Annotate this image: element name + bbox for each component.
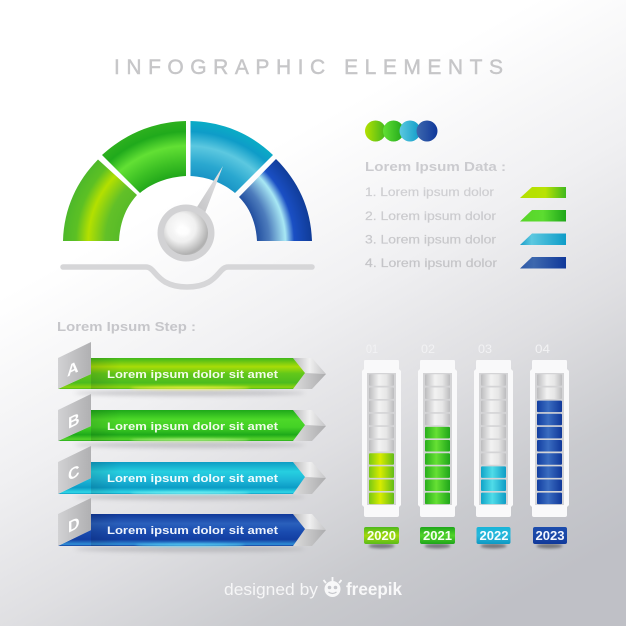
bar column 2023 bbox=[530, 342, 569, 548]
footer credit bbox=[224, 577, 402, 599]
bar column 2020 bbox=[362, 342, 401, 548]
legend item 2: 2. Lorem ipsum dolor bbox=[365, 209, 496, 223]
gauge segment 4 bbox=[239, 159, 312, 241]
column number: 01 bbox=[366, 342, 378, 356]
step ribbon D: Lorem ipsum dolor sit amet bbox=[107, 525, 278, 537]
column number: 02 bbox=[421, 342, 435, 356]
gauge segment 2 bbox=[102, 121, 186, 193]
step ribbon D: D bbox=[68, 513, 80, 537]
year badge bbox=[364, 527, 399, 548]
legend item 3: 3. Lorem ipsum dolor bbox=[365, 232, 496, 246]
column number: 03 bbox=[478, 342, 492, 356]
bar column 2021 bbox=[418, 342, 457, 548]
data legend bbox=[365, 159, 566, 270]
steps heading: Lorem Ipsum Step : bbox=[57, 319, 196, 334]
year badge bbox=[533, 527, 567, 548]
gauge base line bbox=[63, 267, 312, 287]
freepik wordmark: freepik bbox=[346, 579, 402, 599]
bar column 2022 bbox=[474, 342, 513, 548]
legend item 4: 4. Lorem ipsum dolor bbox=[365, 256, 497, 270]
step ribbon A: Lorem ipsum dolor sit amet bbox=[107, 369, 278, 381]
step ribbon A bbox=[58, 342, 326, 396]
legend item 2 bbox=[365, 209, 566, 223]
legend item 1 bbox=[365, 185, 566, 199]
year badge: 2023 bbox=[536, 529, 565, 543]
legend item 3 bbox=[365, 232, 566, 246]
gauge chart bbox=[63, 121, 312, 287]
step ribbon C: Lorem ipsum dolor sit amet bbox=[107, 473, 278, 485]
column number: 04 bbox=[535, 342, 550, 356]
gauge segment 1 bbox=[63, 160, 137, 241]
legend colour dots bbox=[365, 120, 438, 142]
gauge hub bbox=[158, 204, 214, 262]
designed by text: designed by bbox=[224, 581, 319, 599]
legend item 1: 1. Lorem ipsum dolor bbox=[365, 185, 494, 199]
legend heading: Lorem Ipsum Data : bbox=[365, 159, 506, 174]
legend item 4 bbox=[365, 256, 566, 270]
title: INFOGRAPHIC ELEMENTS bbox=[114, 56, 503, 79]
icon: freepik mascot bbox=[324, 577, 342, 597]
year badge: 2022 bbox=[480, 529, 509, 543]
step ribbon B: Lorem ipsum dolor sit amet bbox=[107, 421, 278, 433]
gauge segment 3 bbox=[190, 121, 273, 193]
column frame bbox=[530, 360, 569, 517]
year badge bbox=[420, 527, 455, 548]
step ribbon C bbox=[58, 446, 326, 500]
step ribbon D bbox=[58, 498, 326, 552]
column frame bbox=[474, 360, 513, 517]
step ribbon A: A bbox=[67, 357, 79, 381]
gauge needle bbox=[197, 166, 223, 213]
column frame bbox=[418, 360, 457, 517]
year badge bbox=[476, 527, 510, 548]
year badge: 2020 bbox=[367, 529, 396, 543]
column frame bbox=[362, 360, 401, 517]
year badge: 2021 bbox=[423, 529, 452, 543]
step ribbon B: B bbox=[68, 409, 80, 433]
step ribbon B bbox=[58, 394, 326, 448]
step ribbon C: C bbox=[68, 461, 80, 485]
